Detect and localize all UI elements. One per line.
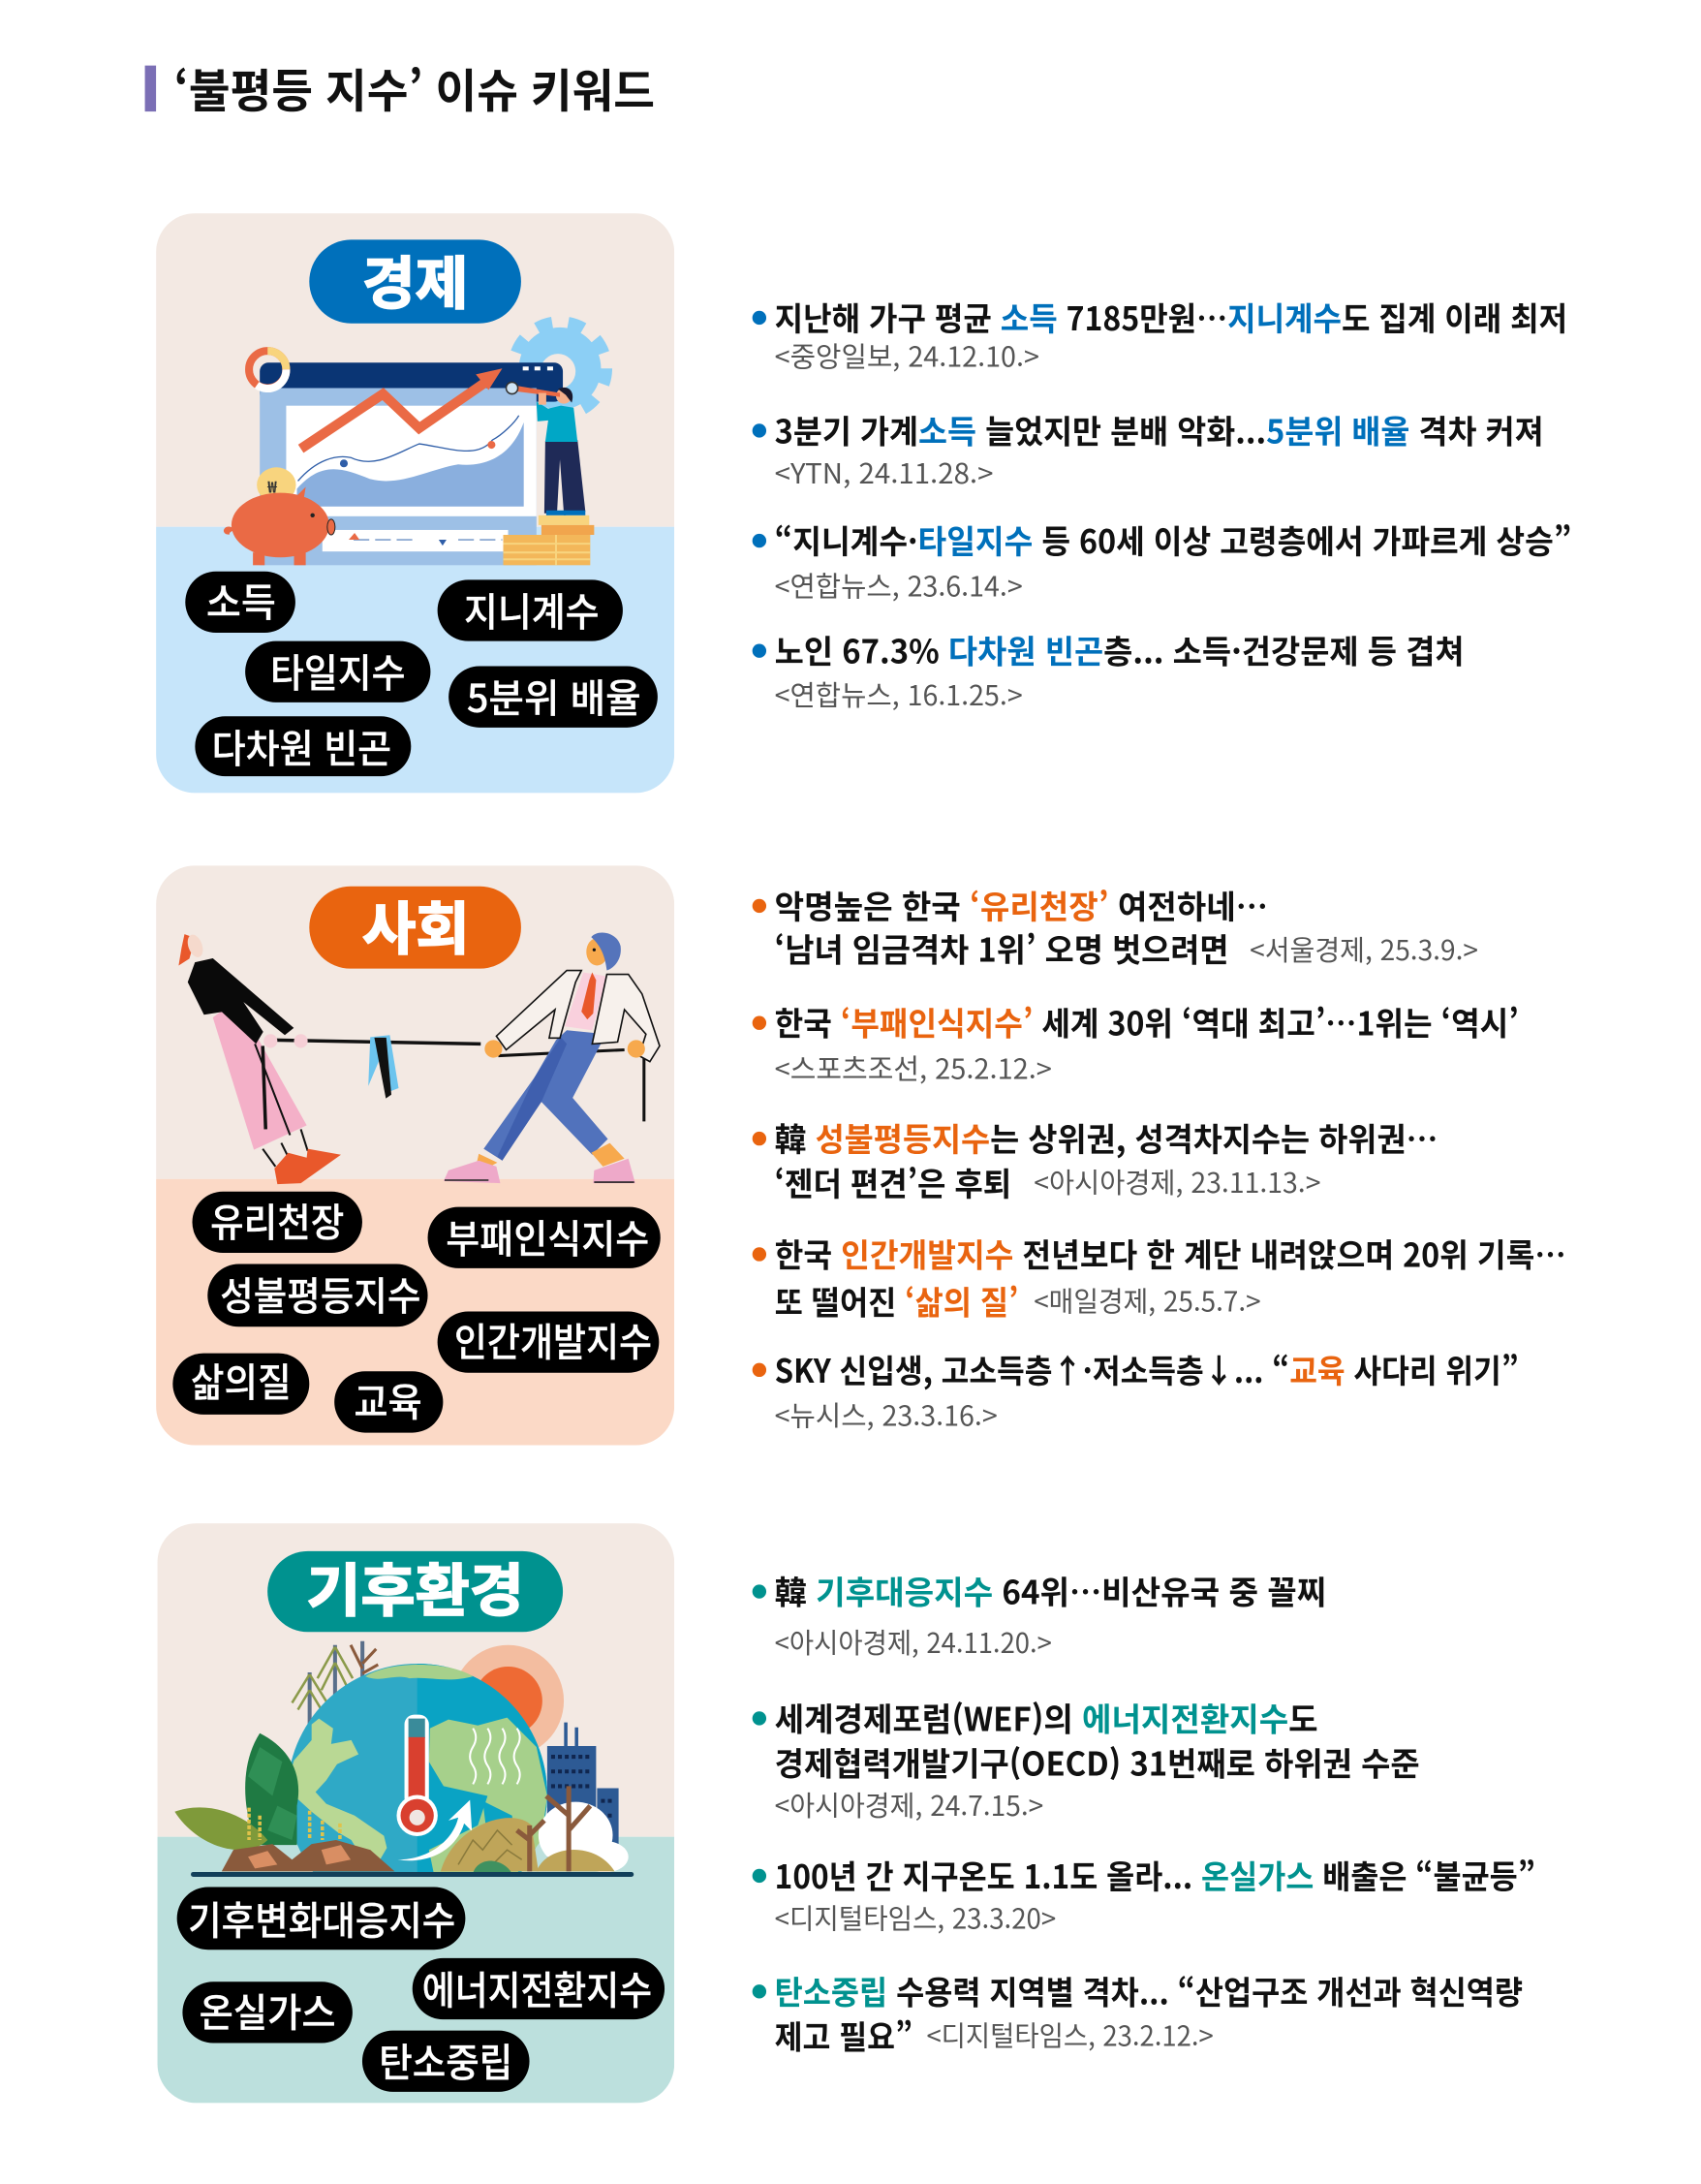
news list: climate and environment: 제고 필요” <box>775 2011 912 2058</box>
keyword tag: 에너지전환지수: 에너지전환지수 <box>422 1958 652 2015</box>
keyword tag: 다차원 빈곤: 다차원 빈곤 <box>212 717 391 774</box>
illustration: chart window, piggy bank and person: ₩ <box>266 475 277 498</box>
keyword tag: 인간개발지수: 인간개발지수 <box>454 1310 652 1367</box>
heading: climate and environment <box>267 1545 563 1632</box>
news list: climate and environment: <디지털타임스, 23.2.12.> <box>926 2014 1214 2054</box>
keyword tag: 소득: 소득 <box>206 571 276 628</box>
news list: society: <매일경제, 25.5.7.> <box>1034 1280 1261 1320</box>
news list: society: 韓 성불평등지수는 상위권, 성격차지수는 하위권… <box>775 1113 1438 1161</box>
title: ‘불평등 지수’ 이슈 키워드 <box>174 54 655 121</box>
news list: economy: 3분기 가계소득 늘었지만 분배 악화...5분위 배율 격차 커져 <box>775 405 1544 452</box>
panel: society <box>156 865 674 1446</box>
heading: climate and environment: 기후환경 <box>306 1545 524 1628</box>
keyword tag: 5분위 배율: 5분위 배율 <box>467 667 641 724</box>
news list: society: 악명높은 한국 ‘유리천장’ 여전하네… <box>775 881 1268 928</box>
keyword tag: 온실가스: 온실가스 <box>200 1981 336 2038</box>
news list: economy: 지난해 가구 평균 소득 7185만원…지니계수도 집계 이래 최저 <box>775 293 1567 340</box>
news list: economy: “지니계수·타일지수 등 60세 이상 고령층에서 가파르게 상승” <box>775 515 1571 563</box>
panel: climate and environment <box>158 1523 674 2103</box>
heading: society: 사회 <box>362 884 470 966</box>
news list: society: 한국 ‘부패인식지수’ 세계 30위 ‘역대 최고’…1위는 ‘역시’ <box>775 998 1519 1045</box>
keyword tag: 타일지수: 타일지수 <box>270 641 406 699</box>
news list: society: <스포츠조선, 25.2.12.> <box>775 1047 1052 1087</box>
keyword tag: 성불평등지수: 성불평등지수 <box>220 1264 420 1322</box>
keyword tag: 유리천장: 유리천장 <box>210 1191 344 1248</box>
keyword tag: 지니계수: 지니계수 <box>464 580 599 638</box>
news list: climate and environment <box>753 1566 1535 2058</box>
news list: society: 한국 인간개발지수 전년보다 한 계단 내려앉으며 20위 기록… <box>775 1229 1566 1276</box>
keyword tag: 교육 <box>334 1370 443 1433</box>
news list: economy <box>753 293 1571 714</box>
keyword tag: 탄소중립: 탄소중립 <box>379 2031 512 2088</box>
news list: economy: 노인 67.3% 다차원 빈곤층... 소득·건강문제 등 겹쳐 <box>775 626 1465 673</box>
illustration: overheating globe <box>174 1641 634 1877</box>
news list: society <box>753 881 1566 1434</box>
keyword tag: 기후변화대응지수: 기후변화대응지수 <box>188 1888 455 1946</box>
news list: society: 또 떨어진 ‘삶의 질’ <box>775 1276 1018 1324</box>
news list: society: <아시아경제, 23.11.13.> <box>1034 1162 1320 1201</box>
news list: economy: <중앙일보, 24.12.10.> <box>775 335 1039 375</box>
news list: society: ‘젠더 편견’은 후퇴 <box>775 1158 1011 1205</box>
keyword tag: 소득 <box>185 571 295 633</box>
news list: climate and environment: 韓 기후대응지수 64위…비산유국 중 꼴찌 <box>775 1566 1326 1613</box>
heading: economy: 경제 <box>362 238 468 321</box>
news list: climate and environment: <디지털타임스, 23.3.20> <box>775 1898 1056 1938</box>
illustration: chart window, piggy bank and person <box>225 323 605 565</box>
news list: economy: <YTN, 24.11.28.> <box>775 452 993 492</box>
heading: economy <box>309 238 521 324</box>
heading: society <box>309 884 521 969</box>
panel: economy <box>156 213 674 793</box>
keyword tag: 부패인식지수: 부패인식지수 <box>446 1207 649 1264</box>
news list: society: ‘남녀 임금격차 1위’ 오명 벗으려면 <box>775 923 1229 971</box>
news list: economy: <연합뉴스, 23.6.14.> <box>775 566 1023 606</box>
news list: climate and environment: 경제협력개발기구(OECD) 31번째로 하위권 수준 <box>775 1737 1420 1785</box>
news list: economy: <연합뉴스, 16.1.25.> <box>775 674 1023 714</box>
news list: climate and environment: 100년 간 지구온도 1.1도 올라... 온실가스 배출은 “불균등” <box>775 1851 1535 1898</box>
keyword tag: 삶의질: 삶의질 <box>191 1351 292 1408</box>
keyword tag: 교육: 교육 <box>354 1370 422 1427</box>
news list: society: SKY 신입생, 고소득층↑·저소득층↓... “교육 사다리 위기” <box>775 1345 1519 1392</box>
news list: climate and environment: 세계경제포럼(WEF)의 에너지전환지수도 <box>775 1693 1318 1740</box>
news list: climate and environment: <아시아경제, 24.11.20.> <box>775 1622 1052 1662</box>
news list: society: <뉴시스, 23.3.16.> <box>775 1394 998 1434</box>
illustration: tug of war <box>178 932 660 1184</box>
news list: society: <서울경제, 25.3.9.> <box>1250 929 1478 969</box>
news list: climate and environment: 탄소중립 수용력 지역별 격차... “산업구조 개선과 혁신역량 <box>775 1966 1523 2013</box>
news list: climate and environment: <아시아경제, 24.7.15.> <box>775 1785 1043 1825</box>
